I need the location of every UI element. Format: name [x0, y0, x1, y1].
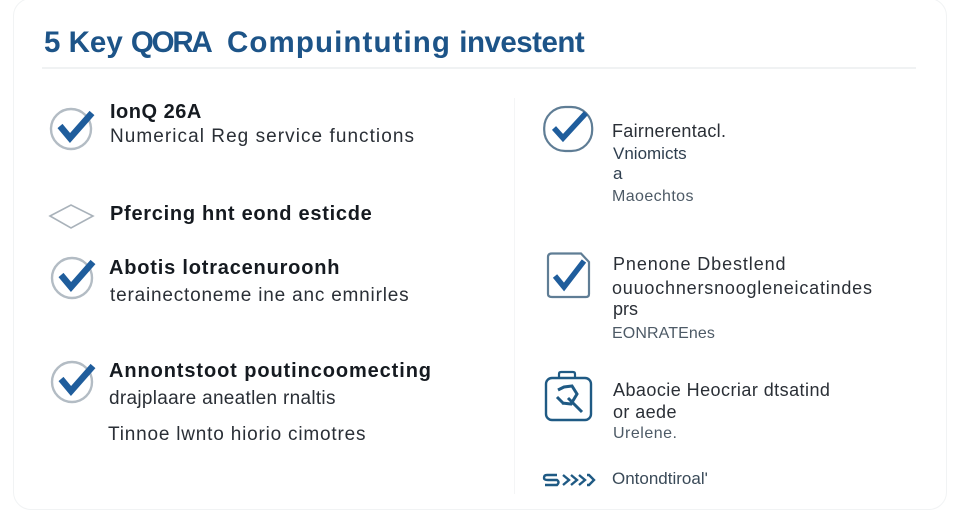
item text 4: drajplaare aneatlen rnaltis	[109, 388, 336, 409]
icon: diamond	[48, 204, 94, 229]
item text 5: Vniomicts	[613, 144, 687, 163]
item heading 7: Abaocie Heocriar dtsatind	[613, 380, 830, 400]
icon: chevrons	[542, 474, 596, 486]
item text 6b: prs	[613, 299, 638, 319]
item text 3: terainectoneme ine anc emnirles	[110, 285, 409, 306]
item heading 2: Pfercing hnt eond esticde	[110, 203, 372, 225]
item heading 1: IonQ 26A	[110, 101, 202, 123]
icon: case with tools	[544, 370, 592, 422]
item text 6: ouuochnersnoogleneicatindes	[612, 278, 873, 298]
item text 7: or aede	[613, 402, 677, 422]
item note 7: Urelene.	[613, 425, 677, 442]
item note 6: EONRATEnes	[612, 325, 715, 342]
icon: rounded check	[543, 106, 594, 152]
item text 1: Numerical Reg service functions	[110, 126, 415, 147]
item text 5b: a	[613, 164, 622, 183]
item heading 5: Fairnerentacl.	[612, 121, 726, 141]
item heading 3: Abotis lotracenuroonh	[109, 257, 340, 279]
icon: document check	[546, 252, 590, 298]
icon: check circle 1	[50, 108, 94, 150]
item heading 4: Annontstoot poutincoomecting	[109, 360, 432, 382]
title: 5 Key QORA Compuintuting investent	[44, 26, 584, 59]
icon: check circle 3	[50, 360, 96, 404]
item note 4: Tinnoe lwnto hiorio cimotres	[108, 424, 366, 445]
item note 5: Maoechtos	[612, 188, 694, 205]
item heading 6: Pnenone Dbestlend	[613, 254, 786, 274]
item heading 8: Ontondtiroal'	[612, 469, 708, 488]
icon: check circle 2	[50, 256, 96, 300]
